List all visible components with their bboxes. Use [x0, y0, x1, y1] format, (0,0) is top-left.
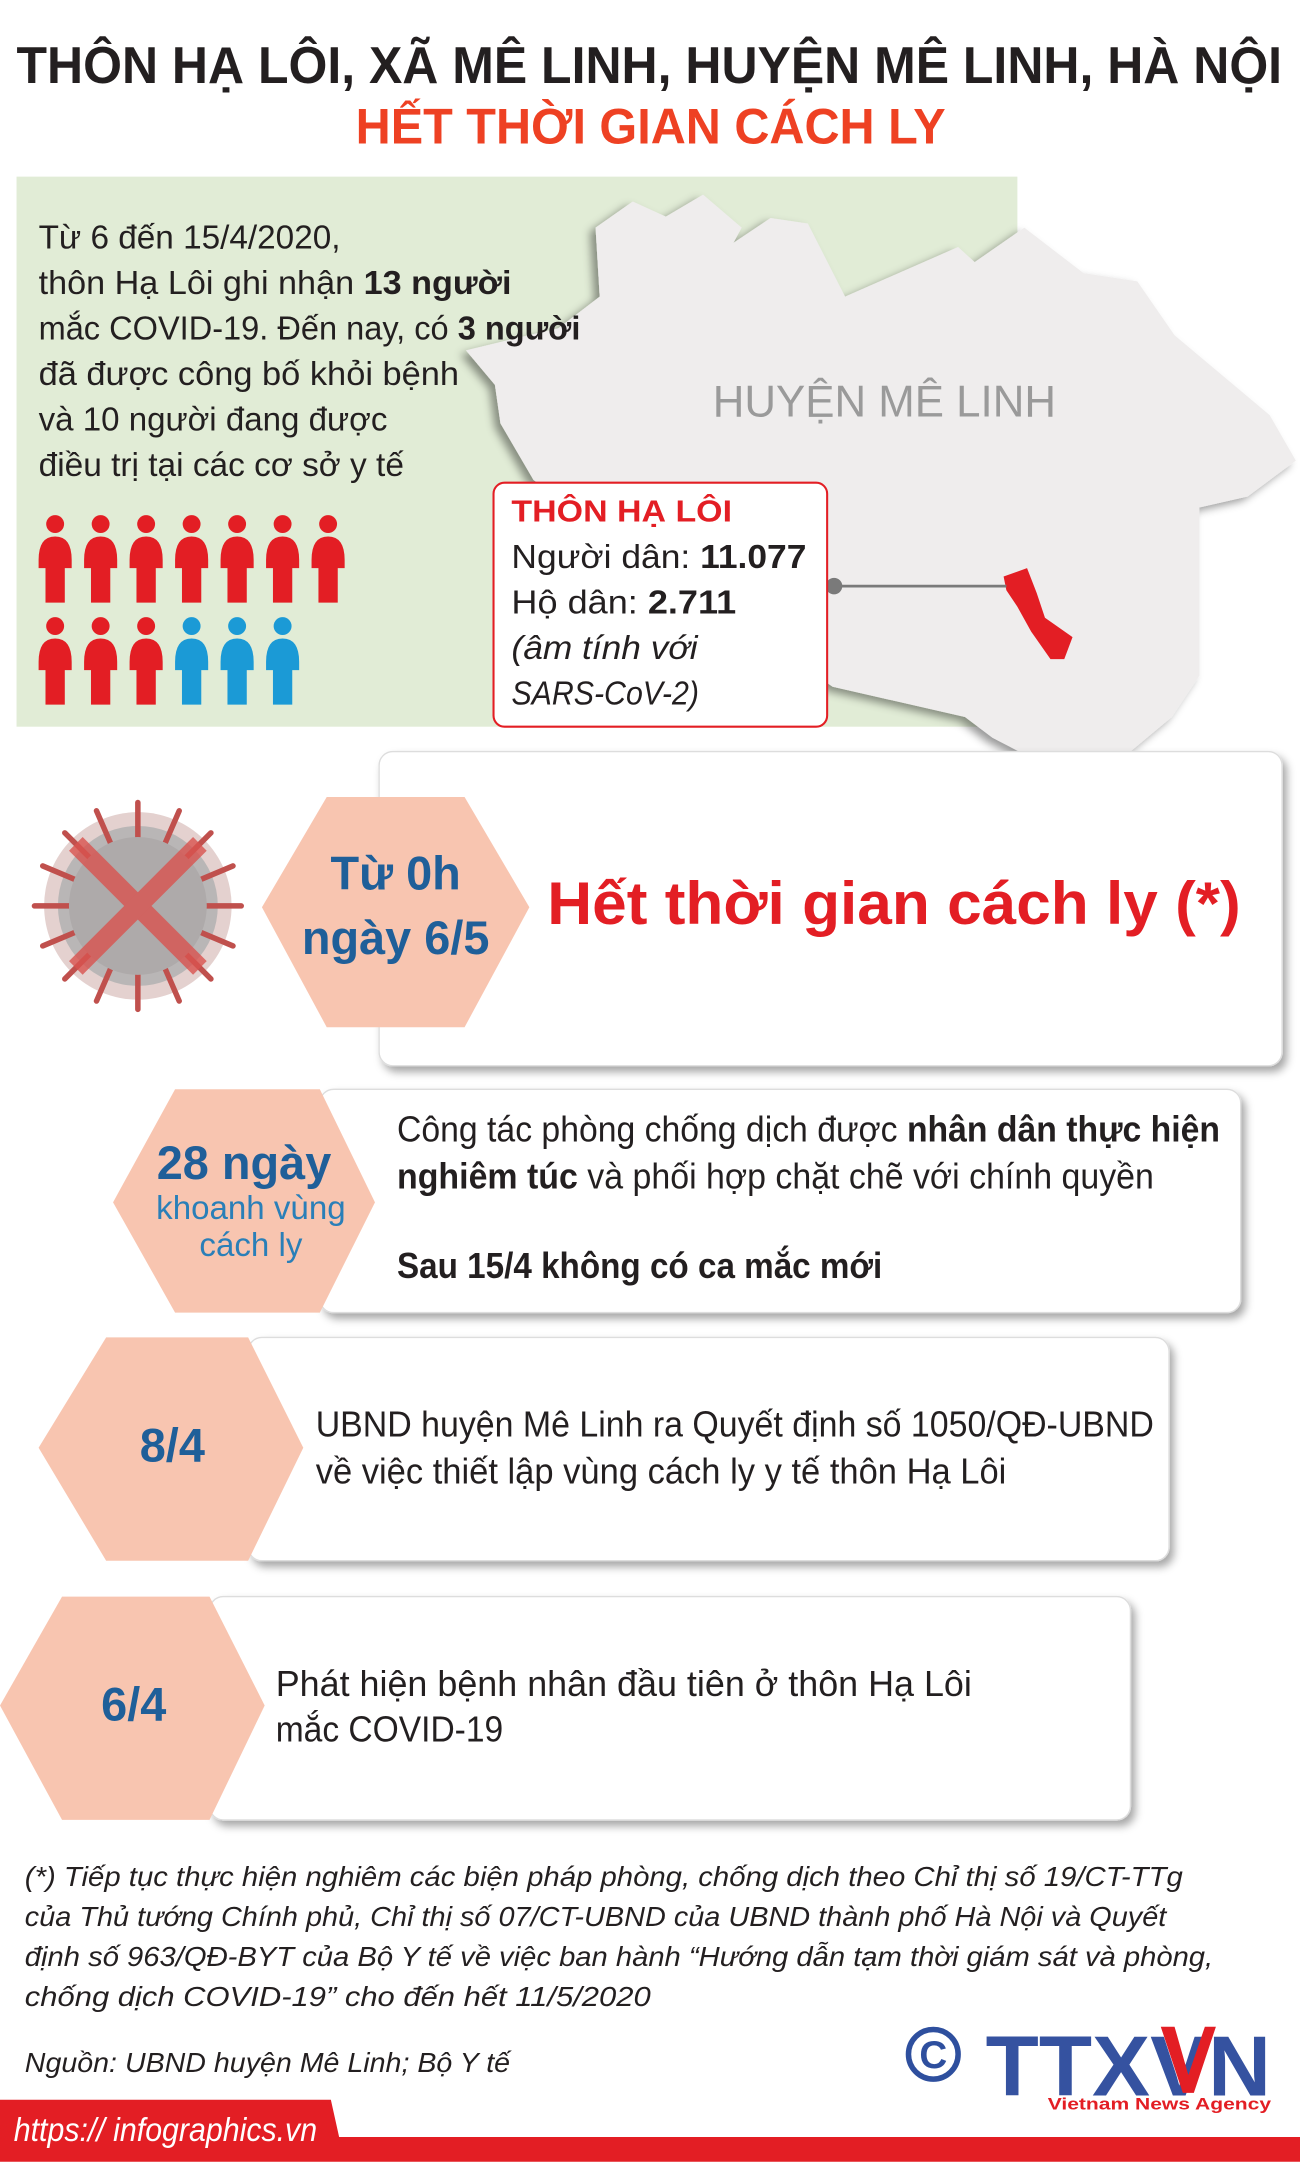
- callout: Thôn Hạ Lôi: (âm tính với: [511, 630, 699, 667]
- panel: card 3 8/4: 8/4: [140, 1419, 205, 1471]
- panel: card 4 6/4: 6/4: [101, 1679, 166, 1731]
- text block: summary: điều trị tại các cơ sở y tế: [39, 447, 404, 484]
- callout: Thôn Hạ Lôi: [494, 483, 827, 727]
- callout: Thôn Hạ Lôi: Hộ dân: 2.711: [511, 585, 736, 622]
- map: Huyện Mê Linh: [466, 195, 1296, 789]
- logo: TTXVN: Vietnam News Agency: [1048, 2094, 1272, 2113]
- icon: virus crossed: [34, 803, 241, 1009]
- title: HẾT THỜI GIAN CÁCH LY: [356, 99, 946, 155]
- text block: summary: [39, 219, 580, 484]
- title: [17, 36, 1282, 155]
- callout: Thôn Hạ Lôi: Người dân: 11.077: [511, 539, 806, 576]
- text block: summary: Từ 6 đến 15/4/2020,: [39, 219, 341, 256]
- logo: TTXVN: TTXVN: [986, 2020, 1271, 2115]
- footnote: [25, 1861, 1213, 2012]
- footnote: chống dịch COVID-19” cho đến hết 11/5/2020: [25, 1981, 651, 2012]
- callout: Thôn Hạ Lôi: SARS-CoV-2): [511, 676, 699, 713]
- panel: card 1 end of quarantine: Từ 0h: [331, 847, 461, 899]
- footnote: của Thủ tướng Chính phủ, Chỉ thị số 07/CT-UBND của UBND thành phố Hà Nội và Quyết: [25, 1901, 1168, 1932]
- text block: summary: mắc COVID-19. Đến nay, có 3 người: [39, 309, 580, 347]
- panel: card 2 28 days: khoanh vùng: [156, 1190, 346, 1227]
- panel: green summary background: [17, 177, 1017, 727]
- map: Huyện Mê Linh: HUYỆN MÊ LINH: [713, 378, 1056, 427]
- panel: card 2 28 days: 28 ngày: [157, 1137, 331, 1189]
- icons: people (10 red, 3 blue): [39, 515, 345, 705]
- footer bar: https:// infographics.vn: [14, 2112, 317, 2149]
- source: Nguồn: UBND huyện Mê Linh; Bộ Y tế: [25, 2047, 512, 2078]
- text block: summary: thôn Hạ Lôi ghi nhận 13 người: [39, 265, 511, 302]
- connector line: [826, 578, 1006, 594]
- panel: card 4 6/4: [0, 1597, 1130, 1820]
- callout: Thôn Hạ Lôi: THÔN HẠ LÔI: [511, 494, 732, 528]
- map: Hạ Lôi area: [1004, 568, 1073, 659]
- panel: card 4 6/4: Phát hiện bệnh nhân đầu tiên ở thôn Hạ Lôi: [276, 1664, 972, 1704]
- footnote: (*) Tiếp tục thực hiện nghiêm các biện pháp phòng, chống dịch theo Chỉ thị số 19/CT-TTg: [25, 1861, 1184, 1892]
- panel: card 2 28 days: cách ly: [199, 1227, 303, 1264]
- logo: TTXVN: C: [919, 2034, 947, 2077]
- panel: card 4 6/4: mắc COVID-19: [276, 1709, 503, 1749]
- panel: card 1 end of quarantine: ngày 6/5: [302, 912, 489, 964]
- text block: summary: đã được công bố khỏi bệnh: [39, 356, 459, 393]
- panel: card 1 end of quarantine: [262, 752, 1282, 1066]
- panel: card 2 28 days: Công tác phòng chống dịch được nhân dân thực hiện: [397, 1110, 1220, 1150]
- panel: card 1 end of quarantine: Hết thời gian cách ly (*): [547, 869, 1241, 937]
- panel: card 3 8/4: về việc thiết lập vùng cách ly y tế thôn Hạ Lôi: [316, 1452, 1006, 1492]
- panel: card 3 8/4: UBND huyện Mê Linh ra Quyết định số 1050/QĐ-UBND: [316, 1405, 1154, 1445]
- panel: card 2 28 days: Sau 15/4 không có ca mắc mới: [397, 1246, 882, 1286]
- panel: card 2 28 days: [113, 1089, 1241, 1313]
- panel: card 3 8/4: [39, 1337, 1169, 1561]
- footer bar: [0, 2100, 1300, 2162]
- panel: card 2 28 days: nghiêm túc và phối hợp chặt chẽ với chính quyền: [397, 1157, 1154, 1197]
- footnote: định số 963/QĐ-BYT của Bộ Y tế về việc ban hành “Hướng dẫn tạm thời giám sát và phòng,: [25, 1941, 1213, 1972]
- text block: summary: và 10 người đang được: [39, 401, 387, 438]
